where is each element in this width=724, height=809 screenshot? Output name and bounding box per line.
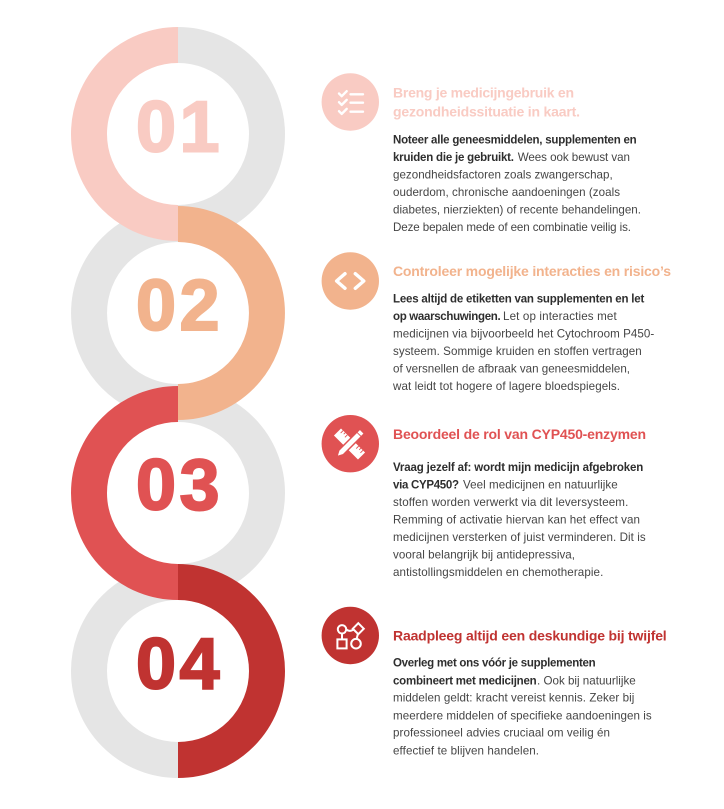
body step 4: . Ook bij natuurlijke [537,674,636,687]
body step 4: Overleg met ons vóór je supplementen [393,658,596,670]
body step 4: middelen geldt: kracht vereist kennis. Zeker bij [393,692,634,705]
ring 1 coloured half [89,45,178,223]
number 03: 03 [136,446,223,526]
chain of four numbered rings [89,45,267,760]
heading step 2: Controleer mogelijke interacties en risico’s [393,263,671,279]
body step 1: Wees ook bewust van [518,151,630,164]
body step 2: op waarschuwingen. [393,311,501,323]
heading step 1: gezondheidssituatie in kaart. [393,104,580,120]
body step 3: stoffen worden verwerkt via dit leversysteem. [393,496,628,509]
body step 3: Remming of activatie hiervan kan het effect van [393,514,640,526]
number 04: 04 [136,624,223,704]
step 4 text [393,628,667,757]
icon: code brackets [322,252,379,310]
body step 1 [393,134,641,234]
body step 3: vooral belangrijk bij antidepressiva, [393,548,575,562]
step 2 text [392,263,671,393]
icon: checklist [322,73,379,131]
ring 3 coloured half [89,404,178,582]
number 01: 01 [136,88,223,168]
body step 3 [393,462,646,579]
body step 2: Lees altijd de etiketten van supplementen en let [393,293,644,305]
heading step 1: Breng je medicijngebruik en [393,84,574,100]
body step 4: effectief te blijven handelen. [393,744,539,757]
body step 2: wat leidt tot hogere of lagere bloedspiegels. [392,380,620,393]
body step 3: medicijnen versterken of juist verminderen. Dit is [393,531,646,544]
body step 2: Let op interacties met [503,310,617,323]
body step 3: Veel medicijnen en natuurlijke [463,478,618,492]
icon: connected shapes [322,607,379,664]
body step 1: ouderdom, chronische aandoeningen (zoals [393,186,620,199]
number 02: 02 [136,266,223,346]
body step 1: gezondheidsfactoren zoals zwangerschap, [393,168,613,181]
body step 2: systeem. Sommige kruiden en stoffen vertragen [393,345,642,358]
body step 4 [393,658,652,757]
pencil [335,429,364,459]
step 1 text [393,84,641,234]
body step 4: meerdere middelen of specifieke aandoeningen is [393,709,652,722]
ring 2 coloured half [178,224,267,402]
body step 3: antistollingsmiddelen en chemotherapie. [393,566,603,579]
ring tracks in grey [89,45,267,760]
heading step 1 [393,84,580,120]
step 3 text [393,426,646,579]
body step 2: of versnellen de afbraak van geneesmiddelen, [393,363,630,376]
body step 1: Deze bepalen mede of een combinatie veilig is. [393,221,631,234]
body step 3: Vraag jezelf af: wordt mijn medicijn afgebroken [393,462,643,474]
ring 4 coloured half [178,582,267,760]
body step 1: diabetes, nierziekten) of recente behandelingen. [393,203,641,216]
icon: ruler and pencil [322,415,379,472]
heading step 3: Beoordeel de rol van CYP450-enzymen [393,426,646,442]
body step 2 [392,293,654,393]
body step 1: kruiden die je gebruikt. [393,152,514,164]
ruler [334,428,365,460]
body step 4: combineert met medicijnen [393,675,537,687]
body step 1: Noteer alle geneesmiddelen, supplementen en [393,134,637,146]
body step 3: via CYP450? [393,480,459,492]
body step 4: professioneel advies cruciaal om veilig én [393,727,610,740]
heading step 4: Raadpleeg altijd een deskundige bij twijfel [393,628,667,644]
body step 2: medicijnen via bijvoorbeeld het Cytochroom P450- [393,328,654,341]
